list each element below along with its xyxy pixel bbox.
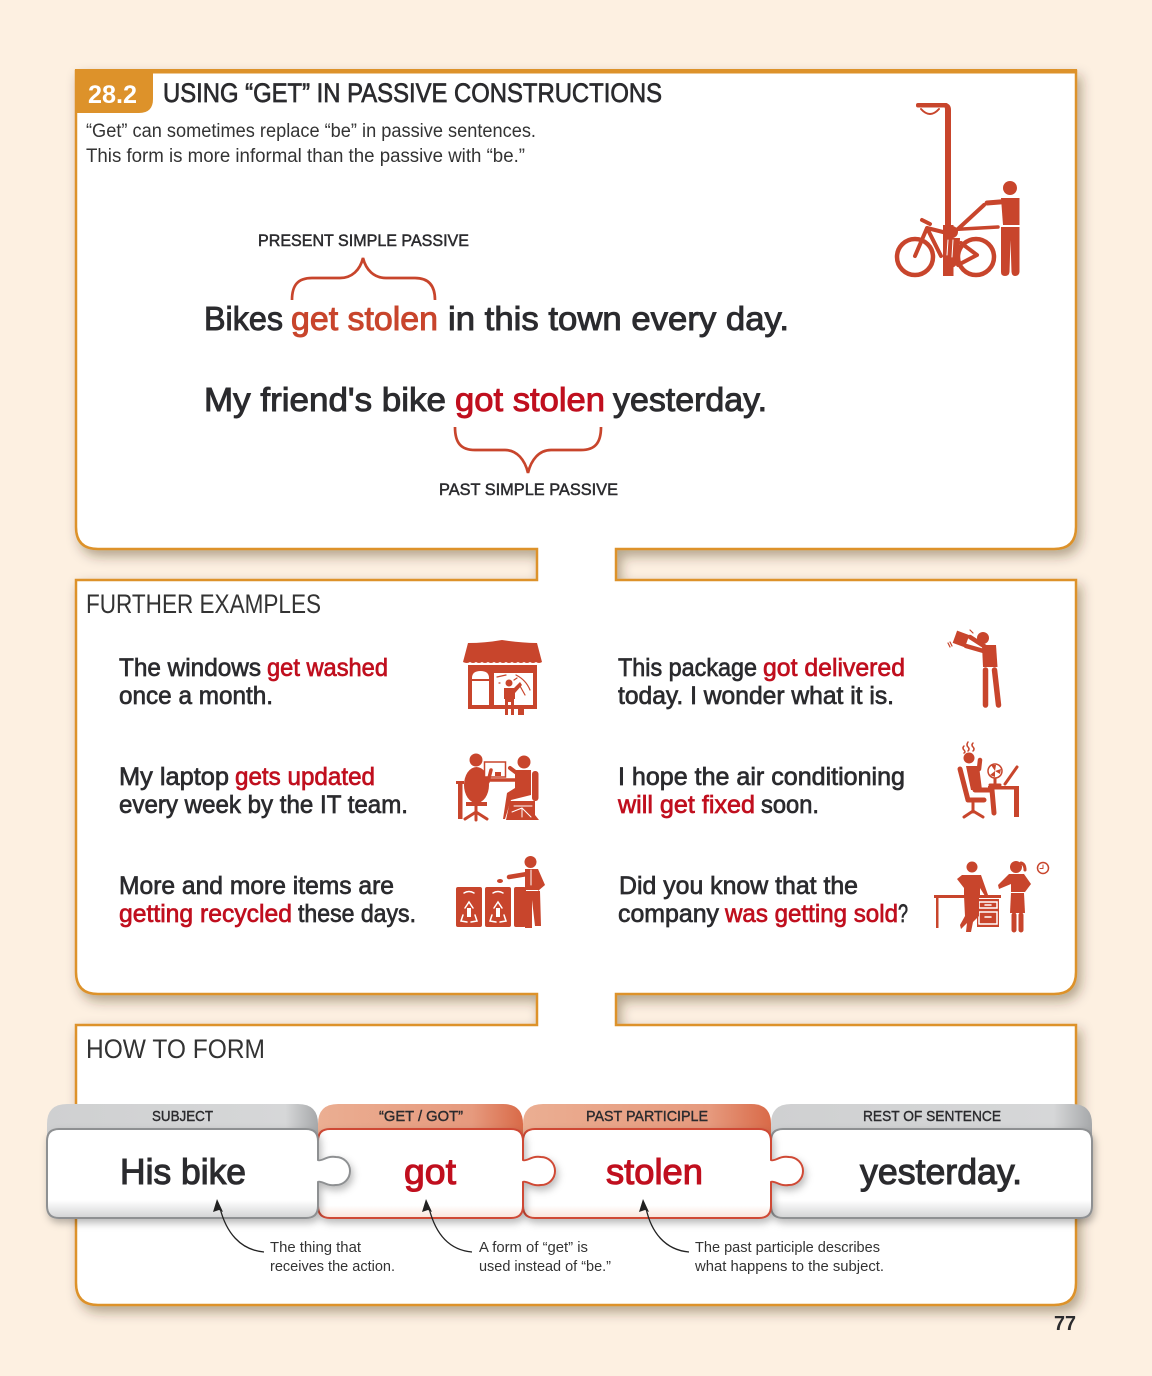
section heading: USING “GET” IN PASSIVE CONSTRUCTIONS — [163, 78, 662, 108]
annotation: past participle — [639, 1199, 884, 1275]
icon: person shaking package — [948, 630, 998, 705]
panel frame: three connected white panels — [76, 71, 1076, 1305]
example: company was getting sold: company — [618, 900, 719, 928]
annotation: subject: The thing that — [270, 1239, 362, 1256]
piece: past participle: PAST PARTICIPLE — [586, 1108, 708, 1125]
example: items getting recycled — [119, 872, 416, 928]
brace: past simple — [455, 427, 601, 473]
panel: using get in passive constructions — [75, 70, 1020, 499]
example: windows get washed: get washed — [267, 654, 388, 682]
example: laptop gets updated: every week by the IT team. — [119, 791, 408, 819]
icon: shop window washer — [463, 640, 542, 715]
piece: get / got — [318, 1104, 555, 1218]
heading: further examples: FURTHER EXAMPLES — [86, 589, 321, 619]
brace: present simple — [292, 258, 435, 300]
example: package got delivered: This package — [618, 654, 757, 682]
example: package got delivered: today. I wonder what it is. — [618, 682, 894, 710]
piece: subject: His bike — [120, 1151, 246, 1192]
annotation: form of get: A form of “get” is — [479, 1239, 588, 1256]
section number tab: 28.2 — [88, 81, 137, 109]
example: air conditioning will get fixed: soon. — [761, 791, 819, 819]
intro text: “Get” can sometimes replace “be” in passive sentences. — [86, 121, 536, 142]
heading: how to form: HOW TO FORM — [86, 1034, 265, 1064]
sentence: my friend's bike got stolen: got stolen — [455, 381, 605, 418]
example: company was getting sold — [618, 872, 908, 928]
section number tab — [75, 70, 153, 113]
example: company was getting sold: ? — [898, 900, 908, 928]
piece: rest of sentence: REST OF SENTENCE — [863, 1108, 1001, 1125]
piece: subject — [47, 1104, 350, 1218]
icon: office colleagues talking — [934, 861, 1048, 932]
annotation: form of get: used instead of “be.” — [479, 1258, 611, 1275]
sentence: bikes get stolen — [204, 300, 789, 337]
sentence: bikes get stolen: Bikes — [204, 300, 283, 337]
example: items getting recycled: these days. — [298, 900, 416, 928]
piece: rest of sentence: yesterday. — [860, 1151, 1022, 1192]
example: company was getting sold: was getting sold — [724, 900, 898, 928]
example: air conditioning will get fixed: I hope the air conditioning — [618, 763, 905, 791]
annotation: subject — [213, 1199, 395, 1275]
example: windows get washed — [119, 654, 388, 710]
intro text: This form is more informal than the passive with “be.” — [86, 146, 525, 167]
icon: IT workers at laptop — [456, 754, 539, 820]
sentence: my friend's bike got stolen: yesterday. — [613, 381, 767, 418]
sentence: bikes get stolen: in this town every day. — [448, 300, 789, 337]
icon: man stealing bike at lamp post — [897, 103, 1020, 276]
icon: man at recycling bins — [456, 856, 545, 928]
example: laptop gets updated: gets updated — [235, 763, 375, 791]
piece: past participle: stolen — [606, 1151, 703, 1192]
piece: get / got: got — [404, 1151, 456, 1192]
annotation: subject: receives the action. — [270, 1258, 395, 1275]
sentence: my friend's bike got stolen: My friend's bike — [204, 381, 446, 418]
example: air conditioning will get fixed — [617, 763, 905, 819]
sentence: my friend's bike got stolen — [204, 381, 767, 418]
label: present simple passive: PRESENT SIMPLE PASSIVE — [258, 231, 469, 250]
piece: past participle — [523, 1104, 803, 1218]
annotation: form of get — [422, 1199, 611, 1275]
example: laptop gets updated: My laptop — [119, 763, 229, 791]
panel: further examples — [86, 589, 1048, 932]
example: air conditioning will get fixed: will get fixed — [617, 791, 755, 819]
page number: 77 — [1054, 1313, 1076, 1335]
panel: how to form — [47, 1034, 1092, 1275]
intro text — [86, 121, 536, 167]
sentence: bikes get stolen: get stolen — [291, 300, 438, 337]
example: package got delivered — [618, 654, 905, 710]
example: items getting recycled: More and more items are — [119, 872, 394, 900]
label: past simple passive: PAST SIMPLE PASSIVE — [439, 480, 618, 499]
example: laptop gets updated — [119, 763, 408, 819]
piece: rest of sentence — [771, 1104, 1092, 1218]
example: windows get washed: once a month. — [119, 682, 273, 710]
example: windows get washed: The windows — [119, 654, 261, 682]
example: company was getting sold: Did you know that the — [619, 872, 858, 900]
example: items getting recycled: getting recycled — [119, 900, 292, 928]
piece: subject: SUBJECT — [152, 1108, 213, 1125]
icon: hot office worker with fan — [960, 742, 1019, 817]
annotation: past participle: what happens to the subject. — [694, 1258, 884, 1275]
annotation: past participle: The past participle describes — [695, 1239, 880, 1256]
example: package got delivered: got delivered — [763, 654, 905, 682]
piece: get / got: “GET / GOT” — [379, 1108, 463, 1125]
puzzle diagram — [47, 1104, 1092, 1218]
